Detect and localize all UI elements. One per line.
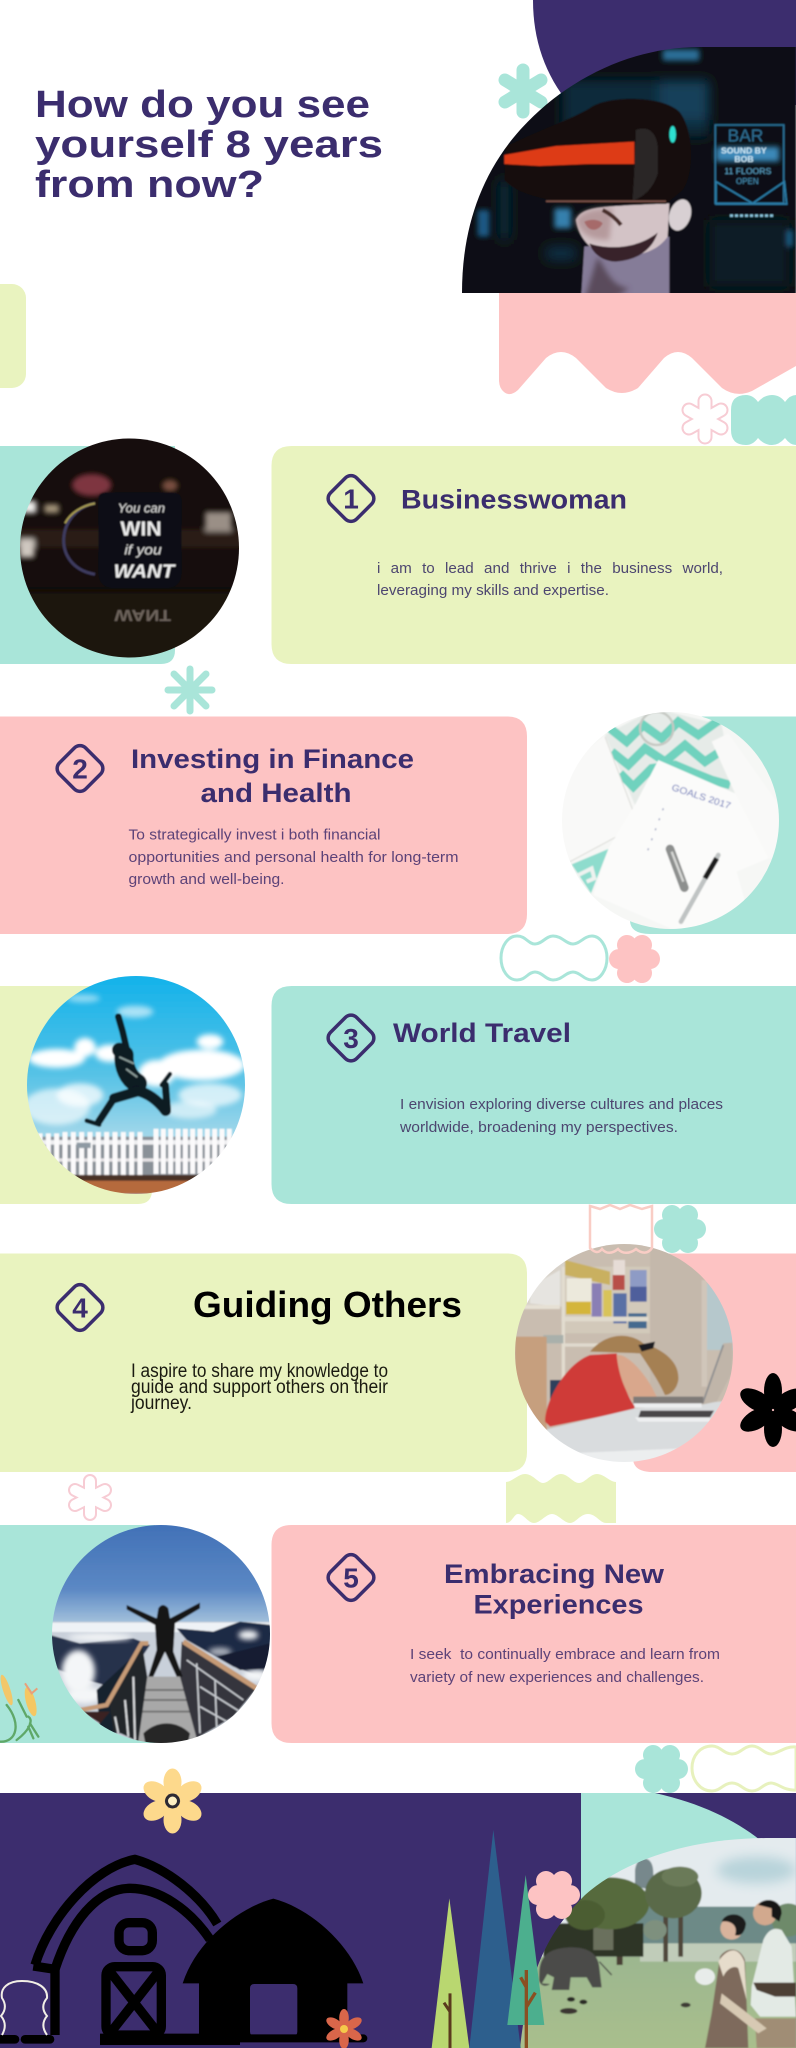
panel: investing in finance and health [0, 716, 527, 934]
neon bar sign: BOB [734, 154, 754, 164]
badge 4: 4 [72, 1292, 88, 1324]
pink lobed flower in footer [538, 1881, 570, 1909]
mug body: if you [124, 541, 162, 557]
green outline scalloped blob [692, 1746, 796, 1791]
left green rounded tab [0, 284, 26, 388]
photo: person jumping over fence [27, 976, 245, 1194]
white outline scalloped shape [1, 1981, 47, 2035]
badge 5 [325, 1551, 377, 1604]
pink outline ribbon [590, 1205, 652, 1253]
panel: embracing new experiences [272, 1525, 796, 1743]
body text 1: leveraging my skills and expertise. [377, 582, 609, 599]
badge 2: 2 [72, 754, 88, 784]
row 3 left green block [0, 986, 152, 1204]
title: yourself 8 years [35, 124, 383, 166]
platform [80, 1642, 257, 1750]
neon bar sign [715, 125, 787, 216]
elephant [539, 1947, 602, 1990]
title: How do you see [35, 84, 370, 126]
heading: guiding others: Guiding Others [193, 1284, 462, 1325]
panel: businesswoman [272, 446, 796, 664]
body text 5: I seek to continually embrace and learn from [410, 1646, 720, 1663]
orange flower [324, 2009, 364, 2048]
laptop and desk [546, 1400, 722, 1454]
body text 1: i am to lead and thrive i the business world, [377, 560, 723, 577]
photo: you can win mug [15, 435, 245, 665]
row 5 left teal block [0, 1525, 155, 1743]
mug body: WIN [120, 519, 162, 541]
body text 2: growth and well-being. [128, 871, 284, 888]
black asterisk flower [736, 1373, 796, 1447]
heading: businesswoman: Businesswoman [401, 484, 627, 514]
black barn illustration [0, 1859, 363, 2042]
green wave ribbon [506, 1474, 616, 1523]
heading: embracing new experiences: Embracing New [444, 1559, 665, 1589]
badge 3: 3 [343, 1023, 359, 1054]
title [35, 84, 383, 206]
trees [543, 1867, 796, 1965]
body text 3: I envision exploring diverse cultures and places [400, 1096, 723, 1113]
teal lobed flower lower [645, 1755, 678, 1783]
woman [545, 1336, 678, 1427]
chevron fabric [605, 708, 735, 805]
teal lobed flower [664, 1215, 696, 1243]
body text 4: I aspire to share my knowledge to [131, 1361, 388, 1382]
body text 4: guide and support others on their [131, 1377, 389, 1398]
footer purple band [0, 1793, 796, 2048]
body text 2 [128, 826, 458, 888]
row 1 left teal block [0, 446, 175, 664]
photo: goals 2017 notebook [570, 712, 779, 929]
neon bar sign: SOUND BY [721, 145, 767, 155]
footer triangular trees [432, 1830, 544, 2048]
row 4 right pink block [633, 1254, 796, 1472]
heading: investing in finance: Investing in Finance [131, 744, 414, 774]
pink wave banner [499, 293, 796, 394]
jumping figure [87, 1017, 170, 1125]
mug body: WANT [114, 606, 172, 623]
teal outline scalloped blob [501, 936, 607, 980]
badge 1: 1 [343, 484, 359, 514]
body text 3: worldwide, broadening my perspectives. [399, 1119, 678, 1136]
teal spoked flower [168, 669, 212, 711]
pink lobed flower [619, 945, 650, 973]
pink outline flower lower [75, 1481, 105, 1514]
badge 2 [54, 742, 106, 795]
photo: goals 2017 notebook: GOALS 2017 [670, 782, 732, 811]
body text 4 [130, 1361, 389, 1414]
teal scalloped blob [731, 395, 796, 445]
heading: investing in finance [131, 744, 414, 808]
badge 3 [325, 1012, 377, 1064]
heading: embracing new experiences [444, 1559, 665, 1620]
person silhouette [127, 1603, 200, 1677]
body text 5 [410, 1646, 720, 1686]
body text 2: To strategically invest i both financial [128, 826, 380, 844]
body text 5: variety of new experiences and challenges. [410, 1669, 704, 1686]
neon bar sign: 11 FLOORS [724, 166, 772, 176]
badge 1 [325, 472, 377, 525]
heading: embracing new experiences: Experiences [474, 1590, 644, 1620]
body text 1 [377, 560, 723, 599]
body text 3 [399, 1096, 723, 1136]
badge 4 [54, 1281, 106, 1334]
yellow daisy [140, 1768, 205, 1834]
decorative plant [0, 1674, 39, 1742]
mug body [64, 492, 182, 623]
neon bar sign: BAR [728, 126, 763, 146]
row 2 right teal block [630, 716, 796, 934]
pink outline flower [689, 401, 721, 437]
neon bar sign: OPEN [736, 177, 759, 186]
mug body: You can [118, 500, 165, 515]
couple [695, 1900, 796, 2048]
purple header shape [533, 0, 796, 105]
photo: woman asleep on laptop [515, 1244, 733, 1462]
picket fence [37, 1129, 237, 1178]
badge 5: 5 [343, 1562, 359, 1594]
photo: person on mountain viewing platform [50, 1520, 277, 1750]
heading: world travel: World Travel [393, 1018, 571, 1048]
panel: guiding others [0, 1254, 527, 1472]
body text 2: opportunities and personal health for long-term [128, 849, 458, 866]
body text 4: journey. [130, 1393, 192, 1414]
panel: world travel [272, 986, 796, 1204]
teal asterisk flower [505, 70, 541, 112]
heading: investing in finance: and Health [200, 778, 352, 808]
photo: man wearing VR headset [456, 40, 796, 300]
mug body: WANT [114, 560, 176, 581]
footer teal arch [581, 1793, 760, 1910]
photo: couple at temple with elephant [510, 1830, 796, 2048]
title: from now? [35, 164, 264, 206]
